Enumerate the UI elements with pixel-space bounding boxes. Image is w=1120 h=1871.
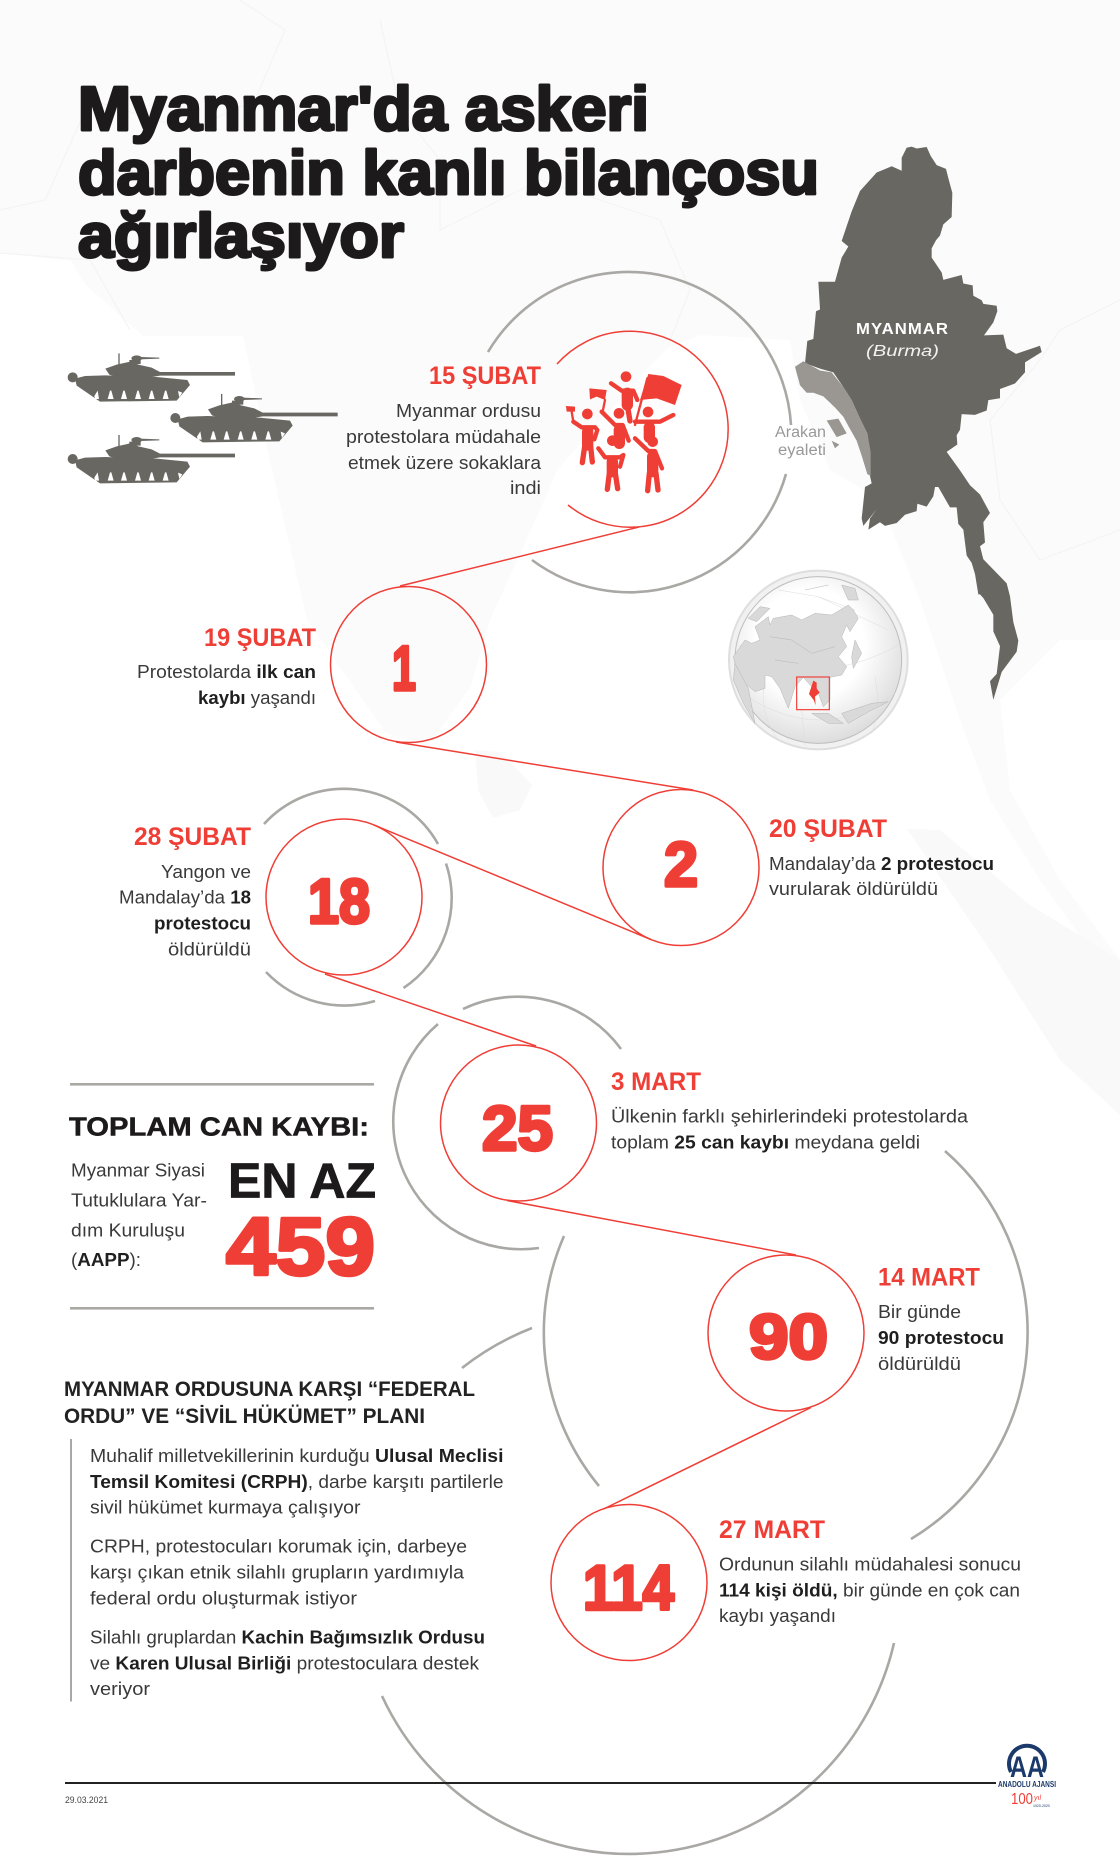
panel: total death toll: EN AZ <box>228 1154 376 1208</box>
event: 28 Şubat: protestocu <box>154 912 251 934</box>
event: 14 Mart: öldürüldü <box>878 1353 961 1374</box>
icon: protesters with flags <box>566 371 682 491</box>
label: Arakan eyaleti: eyaleti <box>778 442 826 459</box>
event: 27 Mart: 114 kişi öldü, bir günde en çok can <box>719 1580 1020 1600</box>
event: 27 Mart: 27 MART <box>719 1516 825 1544</box>
event: 20 Şubat <box>664 815 994 900</box>
paragraph 1 <box>90 1445 504 1518</box>
event: 19 Şubat: 19 ŞUBAT <box>204 624 316 652</box>
event: 28 Şubat: Mandalay’da 18 <box>119 886 251 908</box>
event: 27 Mart: 114 <box>583 1554 674 1624</box>
event: 28 Şubat: Yangon ve <box>161 861 251 882</box>
event: 19 Şubat: kaybı yaşandı <box>198 687 316 708</box>
label: Arakan eyaleti <box>775 424 826 459</box>
panel: total death toll: Tutuklulara Yar- <box>71 1190 207 1210</box>
paragraph 2 <box>90 1536 467 1608</box>
logo: Anadolu Ajansı: yıl <box>1033 1795 1041 1802</box>
event: 20 Şubat: 2 <box>664 830 698 900</box>
paragraph 3: ve Karen Ulusal Birliği protestoculara destek <box>90 1652 480 1674</box>
event: 3 Mart: 25 <box>482 1094 553 1164</box>
paragraph 3: Silahlı gruplardan Kachin Bağımsızlık Ordusu <box>90 1626 485 1648</box>
label: Arakan eyaleti: Arakan <box>775 424 826 441</box>
event: 20 Şubat: vurularak öldürüldü <box>769 878 938 899</box>
title: Myanmar'da askeri <box>78 75 649 144</box>
event: 15 Şubat: 15 ŞUBAT <box>429 362 541 390</box>
logo: Anadolu Ajansı: AA <box>1010 1751 1044 1784</box>
heading <box>64 1378 475 1428</box>
title: darbenin kanlı bilançosu <box>78 139 819 208</box>
logo: Anadolu Ajansı <box>998 1746 1056 1808</box>
tanks <box>68 353 338 483</box>
event: 3 Mart: Ülkenin farklı şehirlerindeki protestolarda <box>611 1106 969 1126</box>
event: 14 Mart: Bir günde <box>878 1301 961 1322</box>
event: 28 Şubat: 28 ŞUBAT <box>134 823 251 851</box>
event: 14 Mart: 14 MART <box>878 1264 980 1292</box>
heading: MYANMAR ORDUSUNA KARŞI “FEDERAL <box>64 1378 475 1401</box>
event: 19 Şubat: 1 <box>392 634 416 704</box>
date: 29.03.2021 <box>65 1795 108 1806</box>
panel: total death toll: (AAPP): <box>71 1249 141 1270</box>
event: 15 Şubat: indi <box>510 477 541 498</box>
footer rule <box>65 1782 996 1784</box>
event: 14 Mart <box>749 1264 1004 1374</box>
red timeline circles and connectors <box>266 331 864 1661</box>
paragraph 2: karşı çıkan etnik silahlı grupların yardımıyla <box>90 1562 465 1582</box>
event: 28 Şubat: 18 <box>308 867 370 937</box>
heading: ORDU” VE “SİVİL HÜKÜMET” PLANI <box>64 1405 425 1428</box>
label: Burma: (Burma) <box>866 343 939 360</box>
event: 27 Mart: Ordunun silahlı müdahalesi sonucu <box>719 1554 1021 1574</box>
event: 19 Şubat: Protestolarda ilk can <box>137 661 316 682</box>
event: 20 Şubat: 20 ŞUBAT <box>769 815 887 843</box>
title: ağırlaşıyor <box>78 202 404 271</box>
gray rings <box>264 272 1028 1854</box>
event: 3 Mart: toplam 25 can kaybı meydana geldi <box>611 1132 920 1152</box>
paragraph 1: Temsil Komitesi (CRPH) , darbe karşıtı partilerle <box>90 1471 504 1492</box>
panel: total death toll: TOPLAM CAN KAYBI: <box>69 1112 369 1142</box>
panel: total death toll <box>69 1083 376 1310</box>
map: Myanmar <box>795 147 1042 700</box>
globe locator <box>729 571 908 749</box>
label: Myanmar: MYANMAR <box>856 321 949 338</box>
region: Arakan <box>795 361 871 476</box>
event: 28 Şubat <box>119 823 370 960</box>
event: 20 Şubat: Mandalay’da 2 protestocu <box>769 853 994 874</box>
logo: Anadolu Ajansı: 100 <box>1011 1791 1033 1808</box>
logo: Anadolu Ajansı: ANADOLU AJANSI <box>998 1780 1056 1789</box>
event: 3 Mart: 3 MART <box>611 1068 701 1096</box>
event: 15 Şubat <box>346 362 542 498</box>
event: 3 Mart <box>482 1068 969 1164</box>
event: 19 Şubat <box>137 624 416 708</box>
event: 15 Şubat: etmek üzere sokaklara <box>348 452 542 473</box>
event: 15 Şubat: Myanmar ordusu <box>396 400 541 421</box>
panel: total death toll: 459 <box>226 1202 375 1292</box>
panel: total death toll: dım Kuruluşu <box>71 1220 185 1240</box>
paragraph 1: Muhalif milletvekillerinin kurduğu Ulusal Meclisi <box>90 1445 504 1466</box>
event: 14 Mart: 90 <box>749 1302 828 1372</box>
panel: total death toll: Myanmar Siyasi <box>71 1160 205 1180</box>
paragraph 3: veriyor <box>90 1678 150 1699</box>
title <box>78 75 819 271</box>
paragraph 2: CRPH, protestocuları korumak için, darbeye <box>90 1536 467 1556</box>
panel: federal army plan <box>64 1378 504 1702</box>
event: 27 Mart <box>583 1516 1021 1626</box>
paragraph 3 <box>90 1626 485 1699</box>
event: 14 Mart: 90 protestocu <box>878 1327 1004 1348</box>
event: 15 Şubat: protestolara müdahale <box>346 426 541 447</box>
paragraph 1: sivil hükümet kurmaya çalışıyor <box>90 1496 360 1518</box>
event: 28 Şubat: öldürüldü <box>168 938 251 960</box>
paragraph 2: federal ordu oluşturmak istiyor <box>90 1588 357 1608</box>
logo: Anadolu Ajansı: 1920-2020 <box>1033 1804 1050 1808</box>
event: 27 Mart: kaybı yaşandı <box>719 1605 836 1626</box>
